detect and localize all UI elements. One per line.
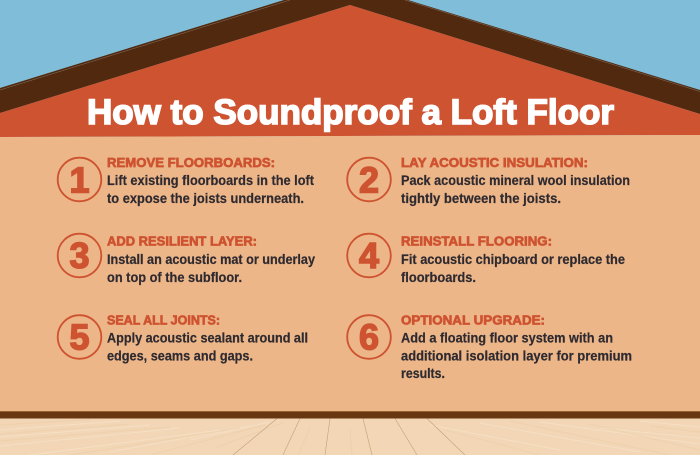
number badge 2 [347, 158, 391, 201]
step 3 text: on top of the subfloor. [107, 270, 242, 285]
number badge 4: 4 [359, 235, 379, 276]
step 6 text [401, 312, 632, 381]
step 2 text: LAY ACOUSTIC INSULATION: [401, 155, 588, 170]
step 1 text: Lift existing floorboards in the loft [107, 173, 314, 188]
sky background [0, 0, 700, 140]
step 3 text: Install an acoustic mat or underlay [107, 252, 315, 267]
number badge 1 [58, 158, 101, 201]
number badge 4 [347, 234, 391, 277]
number badge 5: 5 [69, 316, 90, 358]
number badge 3: 3 [69, 235, 90, 276]
roof beam [0, 0, 700, 114]
step 2 text: tightly between the joists. [401, 191, 561, 206]
step 2 text [401, 155, 630, 206]
step 3 text: ADD RESILIENT LAYER: [107, 234, 257, 249]
roof gable [0, 5, 700, 137]
step 6 text: results. [401, 366, 445, 381]
wooden floor [0, 418, 700, 455]
step 2 text: Pack acoustic mineral wool insulation [401, 173, 630, 188]
step 4 text [401, 234, 625, 285]
step 1 [58, 155, 314, 206]
number badge 6: 6 [359, 316, 379, 358]
step 5 text: Apply acoustic sealant around all [107, 330, 308, 346]
step 5 text [107, 312, 308, 364]
step 6 [347, 312, 632, 381]
step 4 text: REINSTALL FLOORING: [401, 234, 552, 249]
number badge 3 [58, 234, 101, 277]
step 2 [347, 155, 630, 206]
step 5 text: SEAL ALL JOINTS: [107, 312, 220, 327]
number badge 6 [347, 315, 391, 359]
step 3 text [107, 234, 315, 285]
step 1 text [107, 155, 314, 206]
step 6 text: OPTIONAL UPGRADE: [401, 312, 545, 327]
step 1 text: to expose the joists underneath. [107, 191, 304, 206]
number badge 2: 2 [359, 160, 379, 200]
number badge 1: 1 [69, 160, 90, 200]
step 5 text: edges, seams and gaps. [107, 348, 253, 364]
step 4 text: floorboards. [401, 270, 476, 285]
step 4 text: Fit acoustic chipboard or replace the [401, 252, 625, 267]
step 5 [58, 312, 308, 364]
step 4 [347, 234, 625, 285]
step 3 [58, 234, 315, 285]
step 6 text: additional isolation layer for premium [401, 348, 632, 364]
step 1 text: REMOVE FLOORBOARDS: [107, 155, 275, 170]
step 6 text: Add a floating floor system with an [401, 330, 613, 346]
number badge 5 [58, 315, 101, 359]
baseboard [0, 411, 700, 418]
wall [0, 135, 700, 411]
title: How to Soundproof a Loft Floor [87, 93, 614, 132]
